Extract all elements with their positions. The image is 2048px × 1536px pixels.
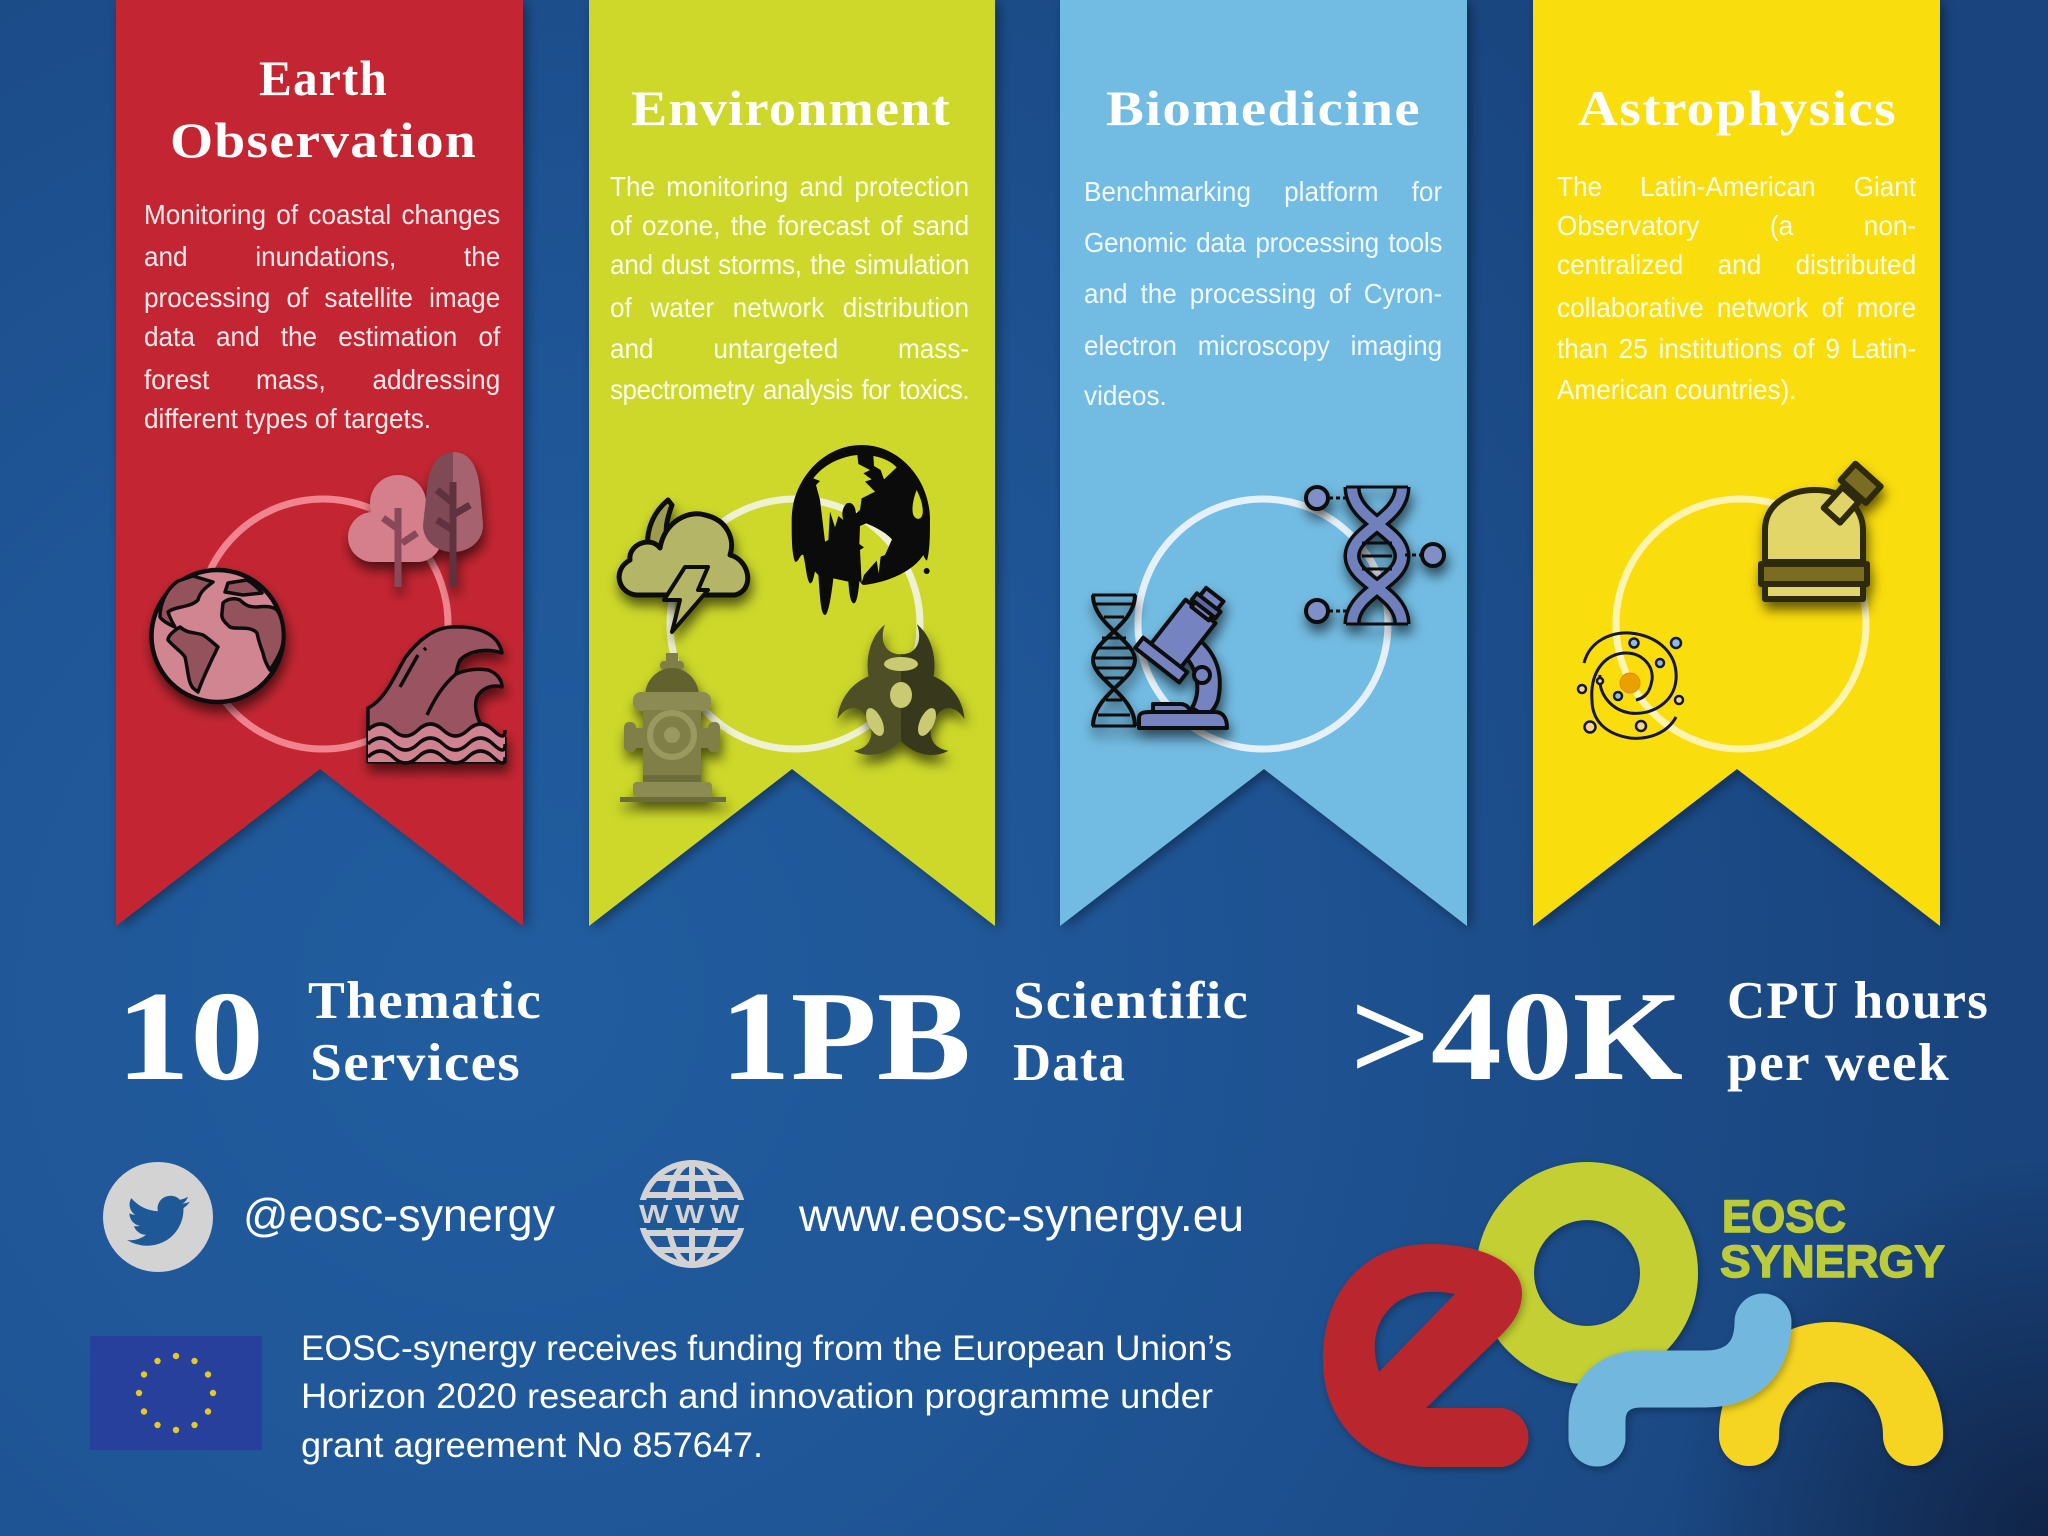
green banner	[589, 0, 995, 926]
funding statement: EOSC-synergy receives funding from the European Union’s	[301, 1329, 1232, 1368]
text block: Earth Observation description	[144, 190, 504, 450]
text block: Earth Observation description: processing of satellite image	[144, 282, 500, 313]
text block: Astrophysics description: American countries).	[1557, 374, 1797, 405]
icon: globe	[152, 570, 284, 702]
text block: Environment description: of water network distribution	[610, 292, 969, 323]
text block: Environment description: and untargeted mass-	[610, 333, 969, 364]
stat: >40K CPU hours per week: >40K	[1350, 965, 1683, 1107]
text block: Environment description: of ozone, the forecast of sand	[610, 210, 969, 241]
logo wordmark: SYNERGY	[1720, 1236, 1945, 1287]
icon: fire hydrant	[620, 653, 726, 802]
icon: www globe	[636, 1163, 748, 1265]
panel: Environment	[589, 0, 995, 926]
text block: Biomedicine description: electron microscopy imaging	[1084, 330, 1442, 361]
text block: Environment description: The monitoring and protection	[610, 171, 969, 202]
stat: >40K CPU hours per week: per week	[1727, 1034, 1950, 1092]
text block: Earth Observation description: Monitoring of coastal changes	[144, 199, 500, 230]
website address: www.eosc-synergy.eu	[798, 1189, 1244, 1241]
funding statement	[301, 1329, 1232, 1465]
logo wordmark	[1720, 1191, 1945, 1287]
logo yellow arch	[1749, 1352, 1913, 1436]
logo blue wave	[1597, 1322, 1763, 1438]
text block: Earth Observation description: different types of targets.	[144, 403, 431, 434]
logo red e	[1323, 1244, 1528, 1467]
text block: Astrophysics description: collaborative network of more	[1557, 292, 1916, 323]
icon: microscope	[1135, 576, 1235, 728]
blue banner	[1060, 0, 1467, 926]
ring	[670, 499, 920, 749]
funding statement: Horizon 2020 research and innovation programme under	[301, 1377, 1213, 1416]
icon: galaxy	[1578, 633, 1683, 738]
text block: Astrophysics description	[1557, 160, 1919, 420]
heading: Environment: Environment	[631, 80, 951, 136]
heading: Astrophysics: Astrophysics	[1578, 80, 1897, 136]
stat: >40K CPU hours per week	[1350, 965, 1989, 1107]
text block: Environment description: spectrometry analysis for toxics.	[610, 374, 969, 405]
ring	[1138, 499, 1388, 749]
text block: Astrophysics description: than 25 institutions of 9 Latin-	[1557, 333, 1916, 364]
text block: Astrophysics description: The Latin-American Giant	[1557, 171, 1916, 202]
icon: biohazard	[829, 624, 973, 768]
icon: DNA strand with nodes	[1306, 487, 1444, 624]
stat: 1PB Scientific Data: Scientific	[1013, 972, 1249, 1030]
text block: Astrophysics description: centralized and distributed	[1557, 249, 1916, 280]
stat: >40K CPU hours per week: CPU hours	[1727, 972, 1989, 1030]
text block: Biomedicine description: videos.	[1084, 380, 1167, 411]
icon: storm cloud	[619, 500, 748, 632]
text block: Environment description: and dust storms, the simulation	[610, 249, 969, 280]
twitter handle: @eosc-synergy	[243, 1189, 555, 1241]
text block: Earth Observation description: data and the estimation of	[144, 321, 500, 352]
text block: Astrophysics description: Observatory (a non-	[1557, 210, 1916, 241]
icon: www globe: WWW	[639, 1200, 740, 1229]
panel: Biomedicine	[1060, 0, 1467, 926]
icon: tidal wave	[368, 627, 505, 763]
text block: Biomedicine description: Benchmarking platform for	[1084, 176, 1442, 207]
ring	[198, 499, 448, 749]
icon: observatory	[1761, 464, 1881, 599]
panel: Earth Observation	[116, 0, 523, 926]
funding statement: grant agreement No 857647.	[301, 1426, 763, 1465]
panel: Astrophysics	[1533, 0, 1940, 926]
icon: melting globe	[792, 445, 930, 615]
icon: EU flag	[90, 1336, 262, 1450]
icon: small DNA helix	[1092, 595, 1136, 726]
heading: Earth Observation: Earth	[259, 50, 388, 106]
text block: Earth Observation description: and inundations, the	[144, 241, 500, 272]
logo: EOSC Synergy	[1323, 1191, 1945, 1467]
stat: 1PB Scientific Data	[720, 965, 1249, 1107]
icon: twitter	[103, 1162, 213, 1272]
text block: Biomedicine description	[1084, 165, 1446, 425]
heading: Earth Observation	[170, 50, 477, 168]
stat: 1PB Scientific Data: Data	[1013, 1034, 1126, 1092]
logo green ring	[1505, 1191, 1669, 1355]
heading: Biomedicine: Biomedicine	[1106, 80, 1421, 136]
icon: trees	[348, 452, 483, 587]
text block: Earth Observation description: forest mass, addressing	[144, 364, 500, 395]
stat: 10 Thematic Services: Thematic	[308, 972, 542, 1030]
logo wordmark: EOSC	[1722, 1191, 1846, 1242]
ring	[1616, 499, 1866, 749]
stat: 10 Thematic Services	[116, 965, 542, 1107]
red banner	[116, 0, 523, 926]
text block: Biomedicine description: Genomic data processing tools	[1084, 227, 1442, 258]
yellow banner	[1533, 0, 1940, 926]
stat: 10 Thematic Services: 10	[116, 965, 264, 1107]
text block: Biomedicine description: and the processing of Cyron-	[1084, 278, 1442, 309]
heading: Earth Observation: Observation	[170, 112, 477, 168]
text block: Environment description	[610, 160, 972, 420]
stat: 1PB Scientific Data: 1PB	[720, 965, 971, 1107]
stat: 10 Thematic Services: Services	[310, 1034, 521, 1092]
